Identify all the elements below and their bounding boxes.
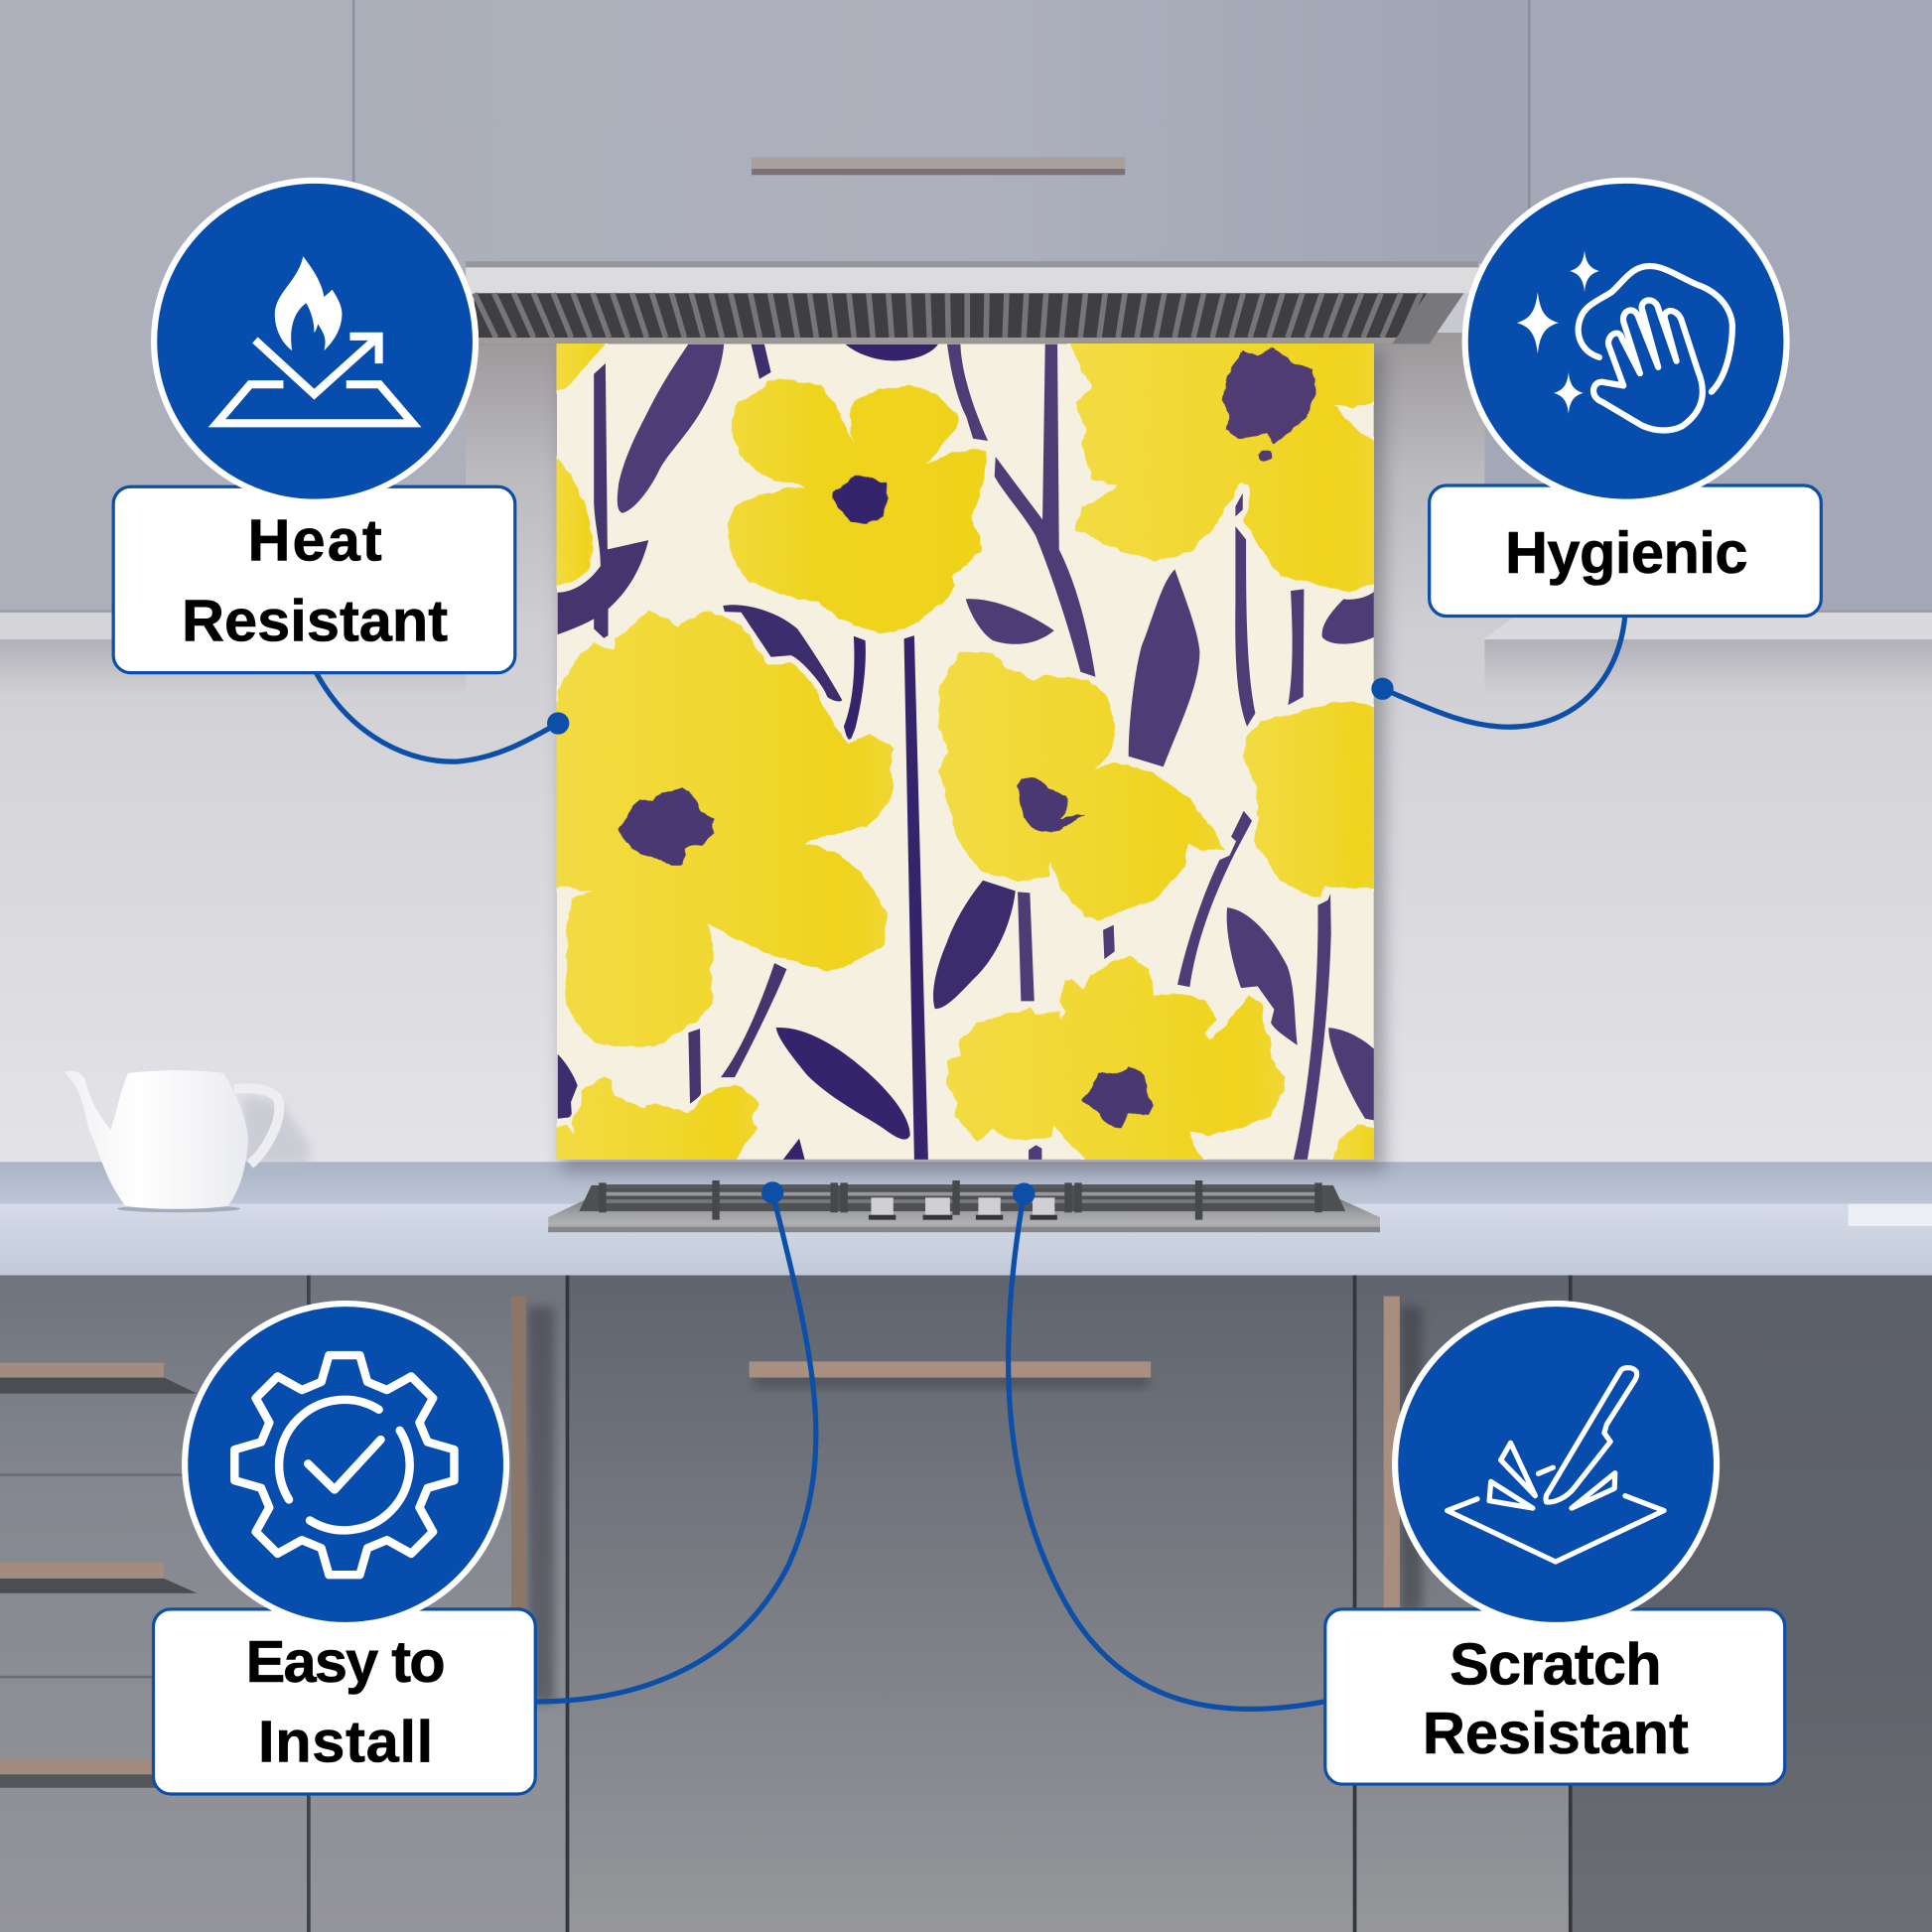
upper cabinets	[0, 0, 466, 613]
label box: Hygienic	[1505, 519, 1747, 586]
icon: wiping hand with sparkles	[1517, 250, 1732, 430]
connector: hygienic	[1371, 614, 1625, 727]
feature: heat resistant	[113, 181, 515, 673]
label box: Easy to	[246, 1628, 446, 1695]
label box	[113, 486, 515, 673]
icon: gear with check mark	[234, 1355, 454, 1575]
horizontal cabinet handles	[0, 1361, 1151, 1788]
label box	[1325, 1609, 1785, 1784]
connector: heat resistant	[314, 669, 569, 761]
upper cabinet handle	[752, 158, 1125, 175]
label box	[154, 1609, 535, 1794]
top right group	[947, 345, 1374, 766]
bottom right group	[933, 811, 1374, 1160]
label box: Scratch	[1449, 1631, 1662, 1698]
flower: right middle	[1243, 702, 1383, 897]
flower: top right	[938, 338, 1383, 920]
flower: bottom left	[549, 1075, 758, 1165]
feature: scratch resistant	[1325, 1304, 1785, 1784]
teapot	[65, 1070, 311, 1212]
badge circle	[185, 1304, 506, 1625]
flower: top centre	[729, 380, 987, 632]
label box: Heat	[247, 507, 382, 574]
lower cabinets	[0, 1276, 1932, 1932]
flower: centre	[938, 652, 1226, 920]
recess under hood	[456, 333, 1503, 619]
flower: left large	[549, 611, 894, 1047]
badge circle	[154, 181, 476, 502]
label box: Install	[258, 1709, 433, 1775]
wall	[0, 613, 1932, 1167]
cream background	[557, 344, 1374, 1160]
top left group	[558, 345, 938, 1160]
right side flowers	[945, 702, 1383, 1165]
panel shadow	[562, 349, 1385, 1172]
flower: top left corner	[556, 344, 608, 395]
icon: knife scratching surface	[1448, 1368, 1664, 1562]
connector: scratch resistant	[1009, 1182, 1324, 1709]
floral glass splashback panel	[549, 338, 1383, 1165]
yellow flowers	[549, 338, 1383, 1165]
label box: Resistant	[182, 587, 448, 653]
flower: bottom right	[1328, 1124, 1374, 1160]
flower: bottom centre	[945, 956, 1284, 1165]
bottom left group	[558, 963, 910, 1160]
feature: easy to install	[154, 1304, 535, 1794]
connector: easy to install	[537, 1181, 816, 1702]
cooker hood	[466, 261, 1478, 344]
feature: hygienic	[1430, 181, 1821, 617]
stems and leaves	[558, 345, 1374, 1160]
icon: flame over reflecting surface	[216, 256, 413, 423]
counter back	[0, 1162, 1932, 1206]
label box: Resistant	[1423, 1700, 1689, 1766]
flower centres	[619, 347, 1316, 1127]
badge circle	[1395, 1304, 1717, 1625]
label box	[1430, 485, 1821, 617]
flower: left edge	[556, 456, 594, 589]
countertop	[0, 1204, 1932, 1276]
badge circle	[1465, 181, 1787, 502]
vertical cabinet handles	[511, 1297, 1422, 1703]
hob	[548, 1180, 1380, 1232]
